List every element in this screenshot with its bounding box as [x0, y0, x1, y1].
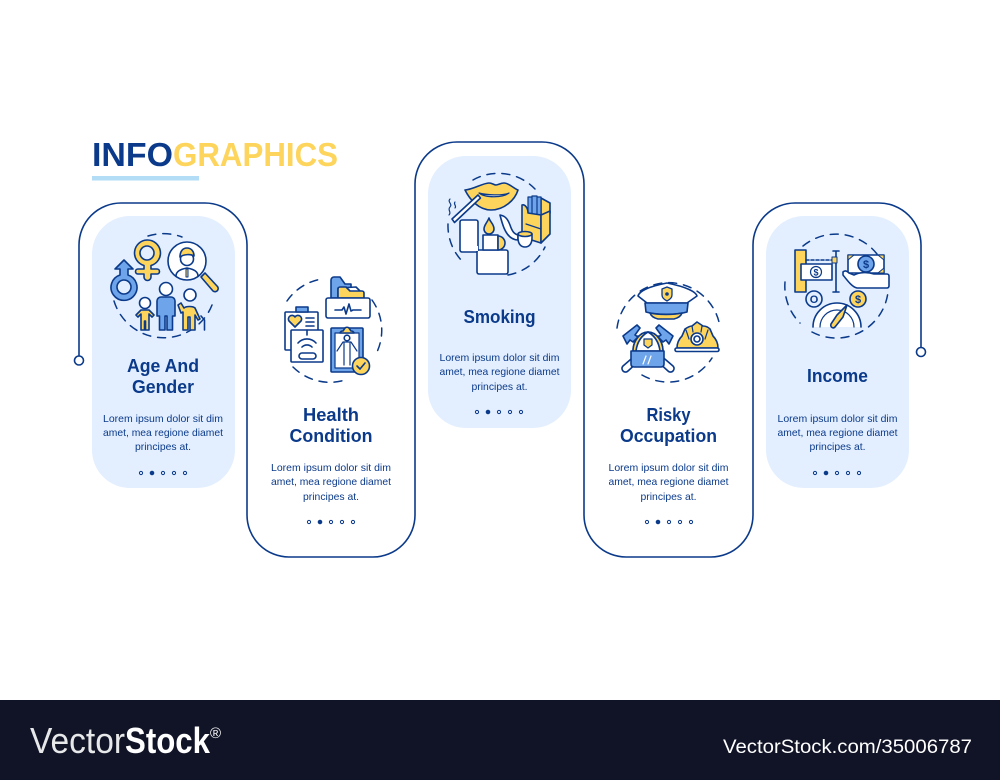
- heading: Condition: [290, 426, 372, 446]
- footer image id: VectorStock.com/35006787: [723, 737, 972, 758]
- body text: principes at.: [303, 491, 359, 503]
- pagination dots: [475, 410, 523, 414]
- serpentine connector outline: [74, 142, 926, 557]
- panel: risky occupation: [608, 283, 729, 524]
- body text: [440, 352, 560, 393]
- heading: Smoking: [464, 307, 536, 327]
- panel: age and gender: [92, 216, 235, 488]
- body text: amet, mea regione diamet: [608, 476, 729, 488]
- heading: Gender: [132, 377, 194, 397]
- body text: amet, mea regione diamet: [440, 366, 560, 378]
- pagination dots: [813, 471, 861, 475]
- body text: principes at.: [135, 441, 191, 453]
- heading: [620, 405, 717, 446]
- heading: [290, 405, 372, 446]
- icon: income: $: [813, 268, 819, 278]
- body text: [778, 413, 898, 453]
- icon: income: $: [863, 259, 869, 271]
- title: [92, 136, 338, 180]
- footer logo: Vector: [30, 720, 125, 761]
- body text: [103, 413, 223, 453]
- icon: smoking: [448, 173, 550, 275]
- body text: principes at.: [810, 441, 866, 453]
- body text: Lorem ipsum dolor sit dim: [608, 462, 729, 474]
- heading: Occupation: [620, 426, 717, 446]
- panel: health condition: [271, 277, 391, 524]
- icon: risky occupation: [617, 283, 720, 382]
- heading: Age And: [127, 356, 199, 376]
- footer logo: ®: [210, 725, 221, 742]
- body text: Lorem ipsum dolor sit dim: [778, 413, 898, 425]
- body text: principes at.: [640, 491, 696, 503]
- heading: [127, 356, 199, 397]
- panel: smoking: [428, 156, 571, 428]
- body text: Lorem ipsum dolor sit dim: [103, 413, 223, 425]
- footer logo: [30, 720, 221, 761]
- body text: [271, 462, 391, 503]
- footer logo: Stock: [125, 720, 211, 761]
- icon: age and gender: [111, 234, 218, 338]
- icon: income: O: [810, 294, 819, 306]
- heading: Health: [303, 405, 359, 425]
- heading: Risky: [646, 405, 690, 425]
- icon: income: [785, 234, 889, 338]
- body text: [608, 462, 729, 503]
- heading: Income: [807, 366, 868, 386]
- body text: Lorem ipsum dolor sit dim: [440, 352, 560, 364]
- body text: amet, mea regione diamet: [778, 427, 898, 439]
- pagination dots: [645, 520, 693, 524]
- icon: income: $: [855, 294, 861, 306]
- icon: health condition: [285, 277, 382, 382]
- pagination dots: [307, 520, 355, 524]
- title: GRAPHICS: [173, 136, 338, 173]
- body text: Lorem ipsum dolor sit dim: [271, 462, 391, 474]
- body text: principes at.: [472, 381, 528, 393]
- title: INFO: [92, 136, 173, 173]
- body text: amet, mea regione diamet: [271, 476, 391, 488]
- footer bar: [0, 700, 1000, 780]
- pagination dots: [139, 471, 187, 475]
- body text: amet, mea regione diamet: [103, 427, 223, 439]
- panel: income: [766, 216, 909, 488]
